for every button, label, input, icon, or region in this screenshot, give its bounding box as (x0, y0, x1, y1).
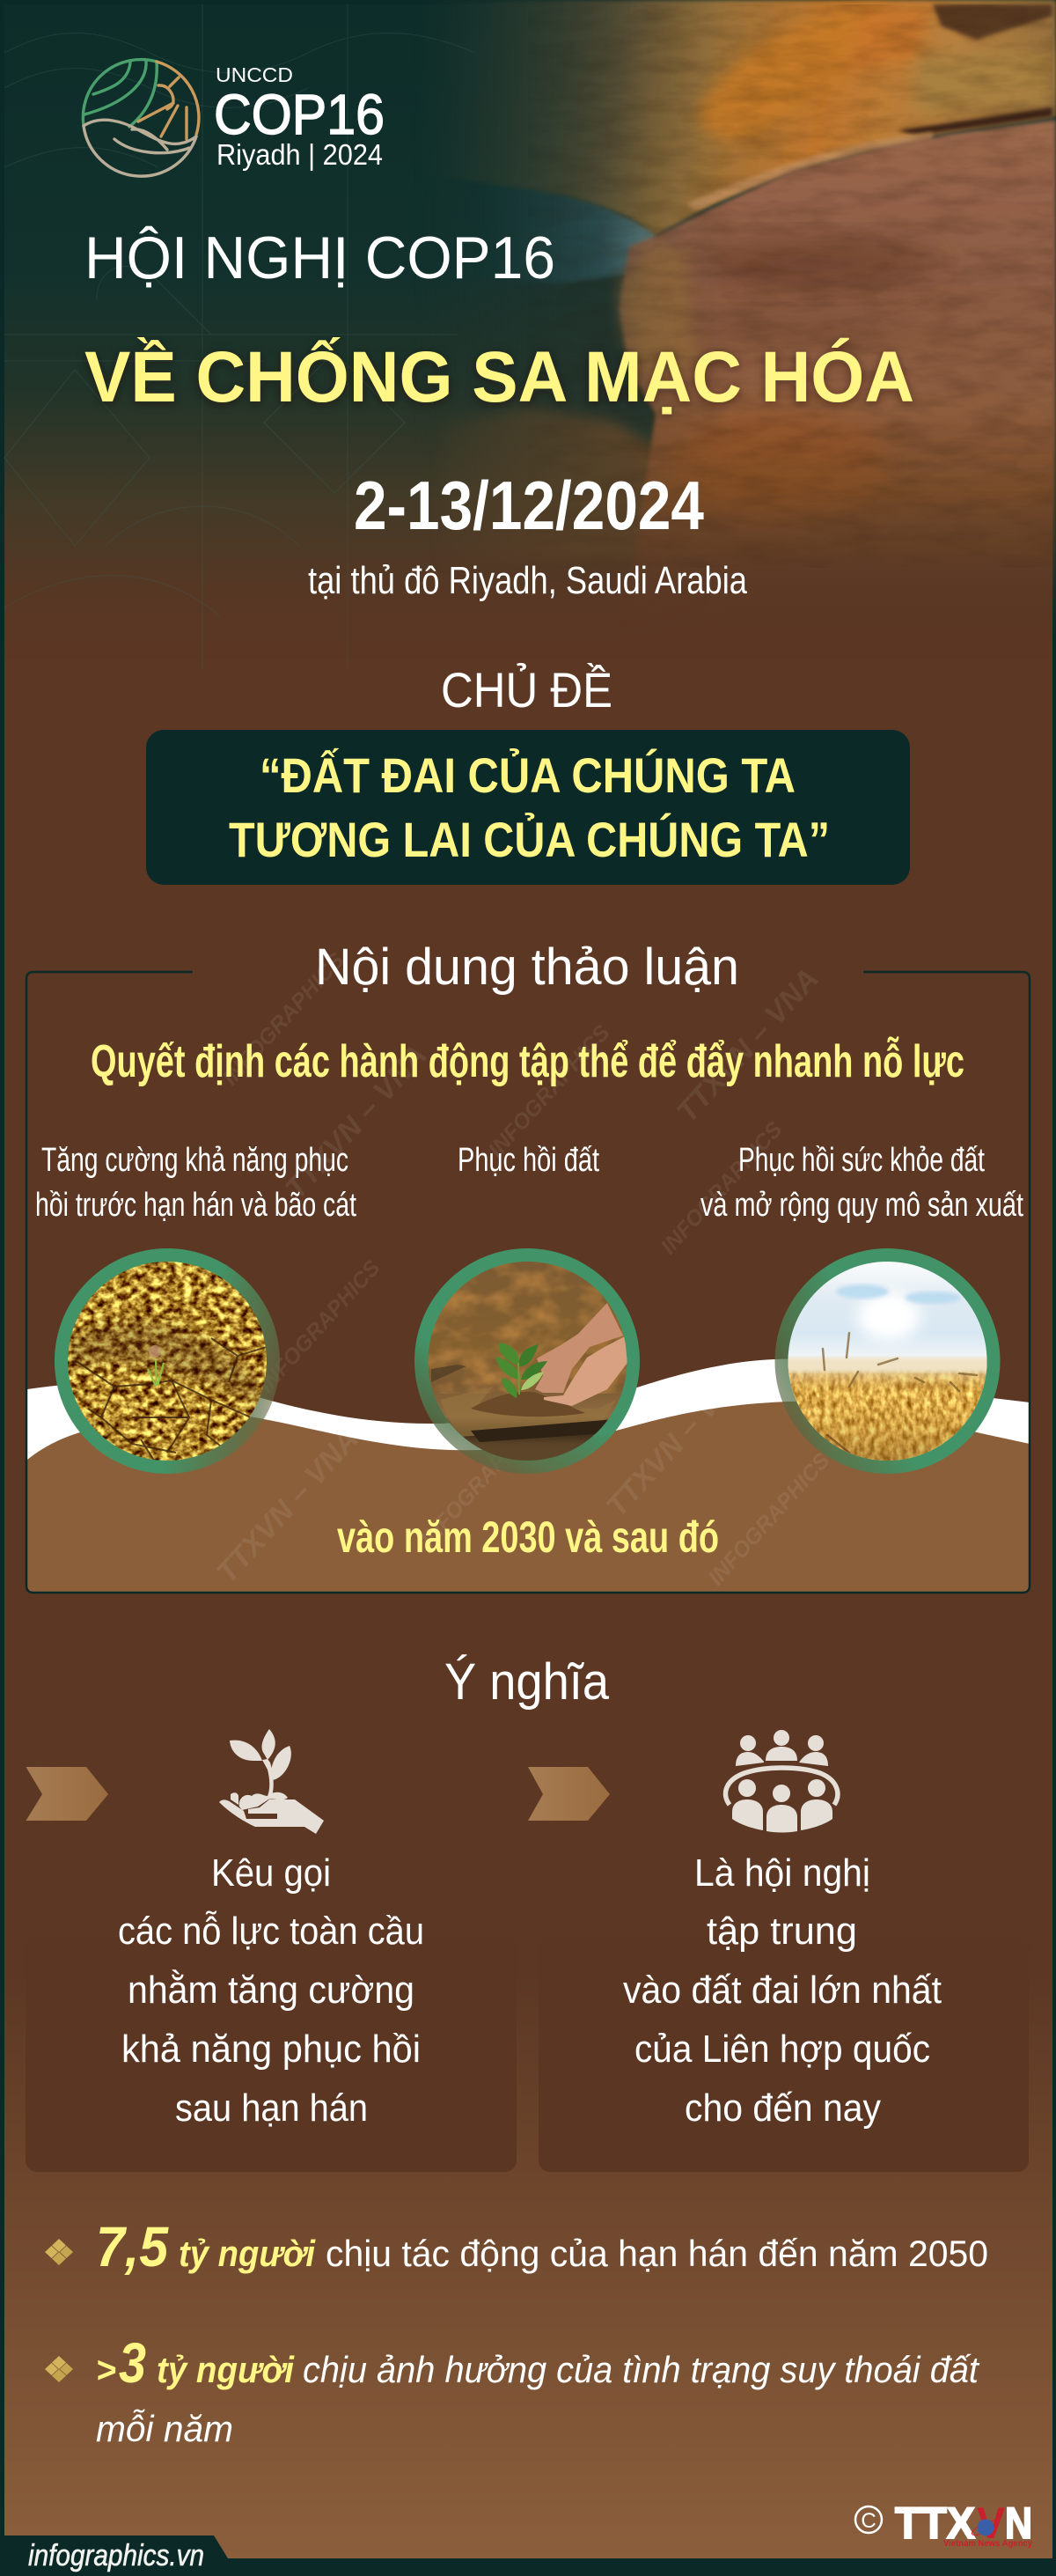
watermarks: INFOGRAPHICS (704, 1448, 835, 1590)
arrow: right chevron (528, 1767, 610, 1821)
location: tại thủ đô Riyadh, Saudi Arabia (308, 559, 747, 602)
near slope (451, 405, 651, 558)
card text: largest land conference (623, 1851, 942, 2130)
item label: drought resilience: Tăng cường khả năng phục (41, 1142, 348, 1179)
footer tab with site name: infographics.vn (28, 2539, 204, 2572)
logo text COP16: COP16 (214, 83, 385, 146)
photo: wheat field (774, 1248, 1000, 1474)
panel: discussion content (26, 948, 1030, 1593)
seedling (496, 1343, 547, 1398)
arrow: left chevron (26, 1767, 108, 1821)
card text: global call (118, 1851, 424, 2130)
card text: global call: các nỗ lực toàn cầu (118, 1910, 424, 1953)
watermarks: INFOGRAPHICS (254, 1255, 385, 1397)
item label: drought resilience: hồi trước hạn hán và bão cát (35, 1187, 356, 1224)
hands (535, 1303, 623, 1393)
watermarks: TTXVN – VNA (210, 1423, 365, 1589)
card backgrounds (26, 1937, 1029, 2172)
TTXVN logo: TTX (895, 2499, 975, 2548)
title line 2: VỀ CHỐNG SA MẠC HÓA (84, 337, 914, 417)
stat: 7.5 billion (96, 2215, 988, 2278)
watermarks: INFOGRAPHICS (656, 1117, 788, 1259)
rock shadow bands (700, 238, 937, 291)
watermarks: TTXVN – VNA (600, 1357, 755, 1523)
TTXVN logo: V (977, 2499, 1006, 2548)
stat: 7.5 billion: 7,5 (96, 2215, 169, 2278)
bottom bar (0, 2558, 1056, 2576)
photo: hands planting seedling (414, 1248, 640, 1474)
lower boulder (616, 120, 1056, 669)
watermarks: INFOGRAPHICS (484, 1020, 615, 1162)
theme line 2: TƯƠNG LAI CỦA CHÚNG TA” (229, 812, 830, 867)
sky opening (512, 190, 656, 283)
card text: global call: sau hạn hán (175, 2087, 368, 2130)
distant mountains (516, 274, 625, 329)
watermarks: TTXVN – VNA (279, 1039, 434, 1205)
logo text Riyadh 2024: Riyadh | 2024 (216, 138, 383, 171)
panel outline with heading gap (26, 972, 1030, 1593)
panel footer text: vào năm 2030 và sau đó (337, 1512, 719, 1562)
orange highlights (695, 4, 898, 140)
stat: over 3 billion: 3 (119, 2331, 146, 2395)
watermarks: INFOGRAPHICS (416, 1409, 547, 1551)
copyright symbol (855, 2506, 882, 2533)
stat: over 3 billion: chịu ảnh hưởng của tình trạng suy thoái đất (303, 2349, 980, 2390)
logo mark (83, 60, 199, 176)
watermarks: TTXVN – VNA (671, 962, 825, 1129)
upper overhang (456, 0, 1056, 236)
card text: largest land conference: tập trung (707, 1910, 857, 1953)
card text: global call: khả năng phục hồi (121, 2028, 421, 2071)
stat: 7.5 billion: chịu tác động của hạn hán đến năm 2050 (326, 2233, 988, 2274)
watermarks: INFOGRAPHICS (218, 948, 349, 1090)
stat: over 3 billion (96, 2331, 980, 2449)
date: 2-13/12/2024 (354, 467, 704, 544)
card text: largest land conference: cho đến nay (685, 2087, 881, 2130)
theme heading: CHỦ ĐỀ (441, 662, 612, 718)
card text: global call: Kêu gọi (211, 1851, 331, 1895)
item label: soil health (700, 1142, 1023, 1224)
icon: people around a table (726, 1730, 838, 1833)
background photo: desert rock arch (456, 0, 1056, 619)
TTXVN logo: N (1005, 2499, 1032, 2548)
card text: global call: nhằm tăng cường (128, 1969, 414, 2012)
theme box (146, 730, 910, 885)
title line 1: HỘI NGHỊ COP16 (84, 224, 555, 291)
watermarks (210, 948, 835, 1590)
item label: drought resilience (35, 1142, 356, 1224)
stat: 7.5 billion: tỷ người (179, 2233, 316, 2274)
card text: largest land conference: vào đất đai lớn nhất (623, 1969, 942, 2012)
copyright symbol: C (861, 2509, 876, 2533)
discussion heading: Nội dung thảo luận (315, 938, 739, 996)
logo text UNCCD: UNCCD (216, 63, 293, 86)
soil mound (471, 1392, 585, 1417)
stat: over 3 billion: > (96, 2349, 116, 2390)
COP16 logo (83, 60, 385, 176)
photo: cracked soil (55, 1248, 280, 1474)
item label: land restoration: Phục hồi đất (458, 1142, 599, 1179)
significance heading: Ý nghĩa (444, 1653, 610, 1711)
wavy band and ground (27, 1359, 1030, 1593)
stat: over 3 billion: mỗi năm (96, 2408, 233, 2449)
bullet icon 2 (45, 2356, 73, 2382)
theme line 1: “ĐẤT ĐAI CỦA CHÚNG TA (260, 747, 796, 803)
TTXVN logo (895, 2499, 1032, 2549)
rock texture (599, 4, 1052, 539)
icon: hand holding sprout (219, 1729, 324, 1834)
TTXVN logo: Vietnam News Agency (943, 2539, 1032, 2549)
bullet icon 1 (45, 2239, 73, 2265)
card text: largest land conference: của Liên hợp quốc (634, 2028, 930, 2071)
stat: over 3 billion: tỷ người (157, 2349, 295, 2390)
card text: largest land conference: Là hội nghị (694, 1851, 870, 1895)
